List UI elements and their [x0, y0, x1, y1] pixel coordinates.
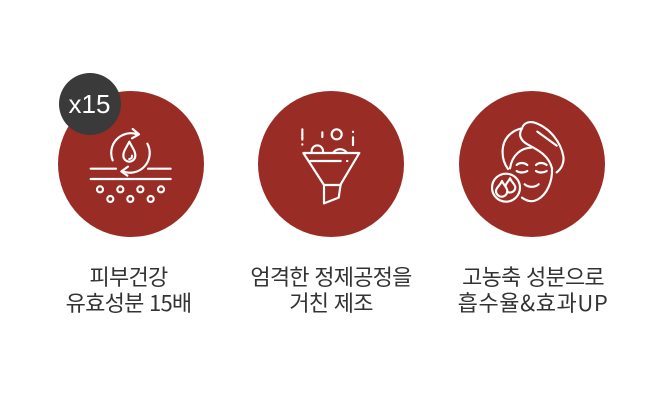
- icon: funnel: [302, 129, 359, 203]
- caption: skin: [66, 260, 191, 318]
- caption: skin: 피부건강: [90, 260, 167, 292]
- caption: purification: [250, 260, 412, 318]
- icon: face with towel and drops: [492, 122, 564, 202]
- caption: purification: 엄격한 정제공정을: [250, 260, 412, 292]
- icon: skin absorption: [91, 129, 171, 202]
- caption: absorption: 흡수율&효과UP: [458, 286, 608, 318]
- circle: absorption: [459, 91, 605, 237]
- circle: purification: [258, 91, 404, 237]
- caption: absorption: [458, 260, 608, 318]
- caption: skin: 유효성분 15배: [66, 286, 191, 318]
- circle: skin benefit: [58, 91, 204, 237]
- caption: absorption: 고농축 성분으로: [462, 260, 604, 292]
- caption: purification: 거친 제조: [289, 286, 373, 318]
- badge: x15: [59, 73, 121, 135]
- badge: x15: x15: [69, 89, 110, 119]
